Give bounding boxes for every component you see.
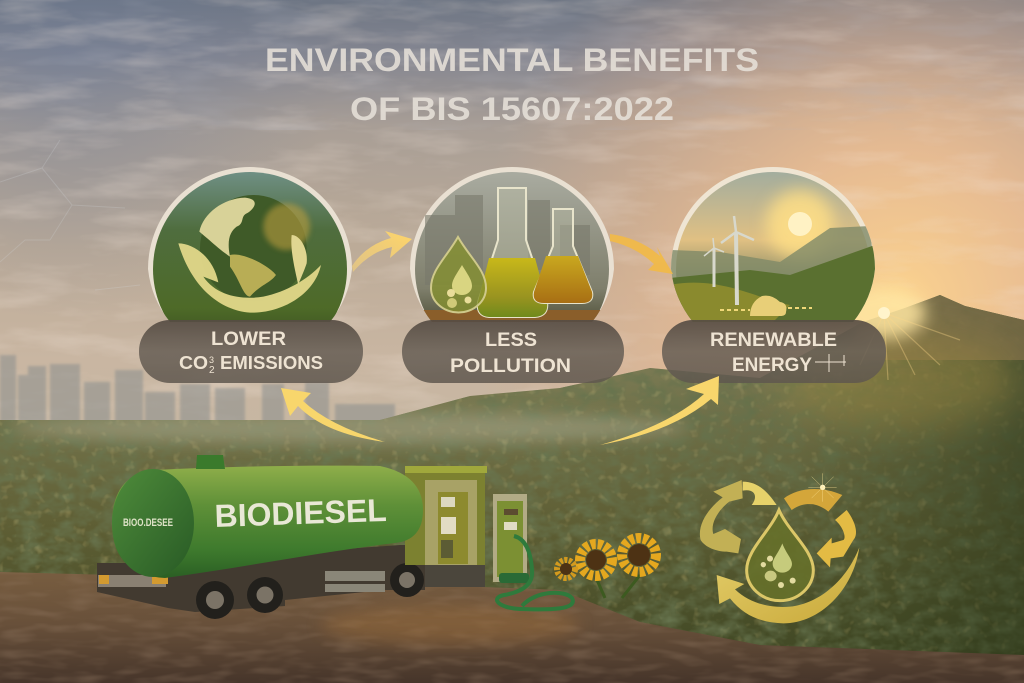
panel: lower CO2 emissions	[139, 167, 363, 383]
label pill: less pollution	[402, 320, 624, 383]
tank hatch	[196, 455, 225, 469]
icon: globe with recycling arrow	[148, 167, 352, 322]
arrow: from emissions to pollution	[352, 231, 412, 272]
background: sunset sky	[0, 0, 1024, 450]
title: ENVIRONMENTAL BENEFITS	[265, 42, 759, 78]
label pill: less pollution: POLLUTION	[450, 356, 571, 377]
icon: recycling loop with fuel drop	[700, 473, 859, 623]
label pill: lower CO2 emissions: 3	[209, 355, 214, 365]
tank label: biodiesel: BIODIESEL	[214, 492, 387, 534]
tank body	[112, 466, 423, 578]
icon: flasks of biofuel and oil drop	[410, 167, 614, 322]
title: OF BIS 15607:2022	[350, 91, 674, 127]
label pill: lower CO2 emissions: EMISSIONS	[220, 353, 323, 373]
label pill: renewable energy: ENERGY	[732, 355, 812, 376]
background: dirt ground	[0, 565, 1024, 683]
icon: sunflowers	[557, 538, 656, 598]
arrow: from biodiesel up to renewable energy	[600, 376, 719, 445]
background: distant city skyline	[0, 355, 395, 426]
label pill: lower CO2 emissions: LOWER	[211, 329, 286, 350]
icon: sun, wind turbines and electric car	[671, 167, 875, 322]
arrow: from pollution to renewable energy	[610, 234, 673, 274]
tank rear end	[112, 469, 194, 577]
sun flare on horizon	[842, 287, 960, 380]
tank side label: BIOO.DESEE	[123, 517, 173, 529]
label pill: less pollution: LESS	[485, 330, 537, 351]
label pill: lower CO2 emissions	[139, 320, 363, 383]
illustration: biodiesel tanker truck	[97, 455, 487, 619]
panel: renewable energy	[662, 167, 886, 383]
background: green hills and mountain	[0, 287, 1024, 683]
truck cab	[405, 466, 487, 587]
label pill: renewable energy: RENEWABLE	[710, 330, 837, 351]
label pill: renewable energy	[662, 320, 886, 383]
title	[265, 42, 759, 127]
label pill: lower CO2 emissions: CO	[179, 353, 208, 373]
icon: fuel pump and hose	[493, 494, 573, 609]
arrow: from biodiesel up to lower emissions	[281, 388, 385, 442]
label pill: lower CO2 emissions: 2	[209, 365, 215, 376]
truck chassis and wheels	[97, 545, 425, 619]
panel: less pollution	[402, 167, 624, 383]
